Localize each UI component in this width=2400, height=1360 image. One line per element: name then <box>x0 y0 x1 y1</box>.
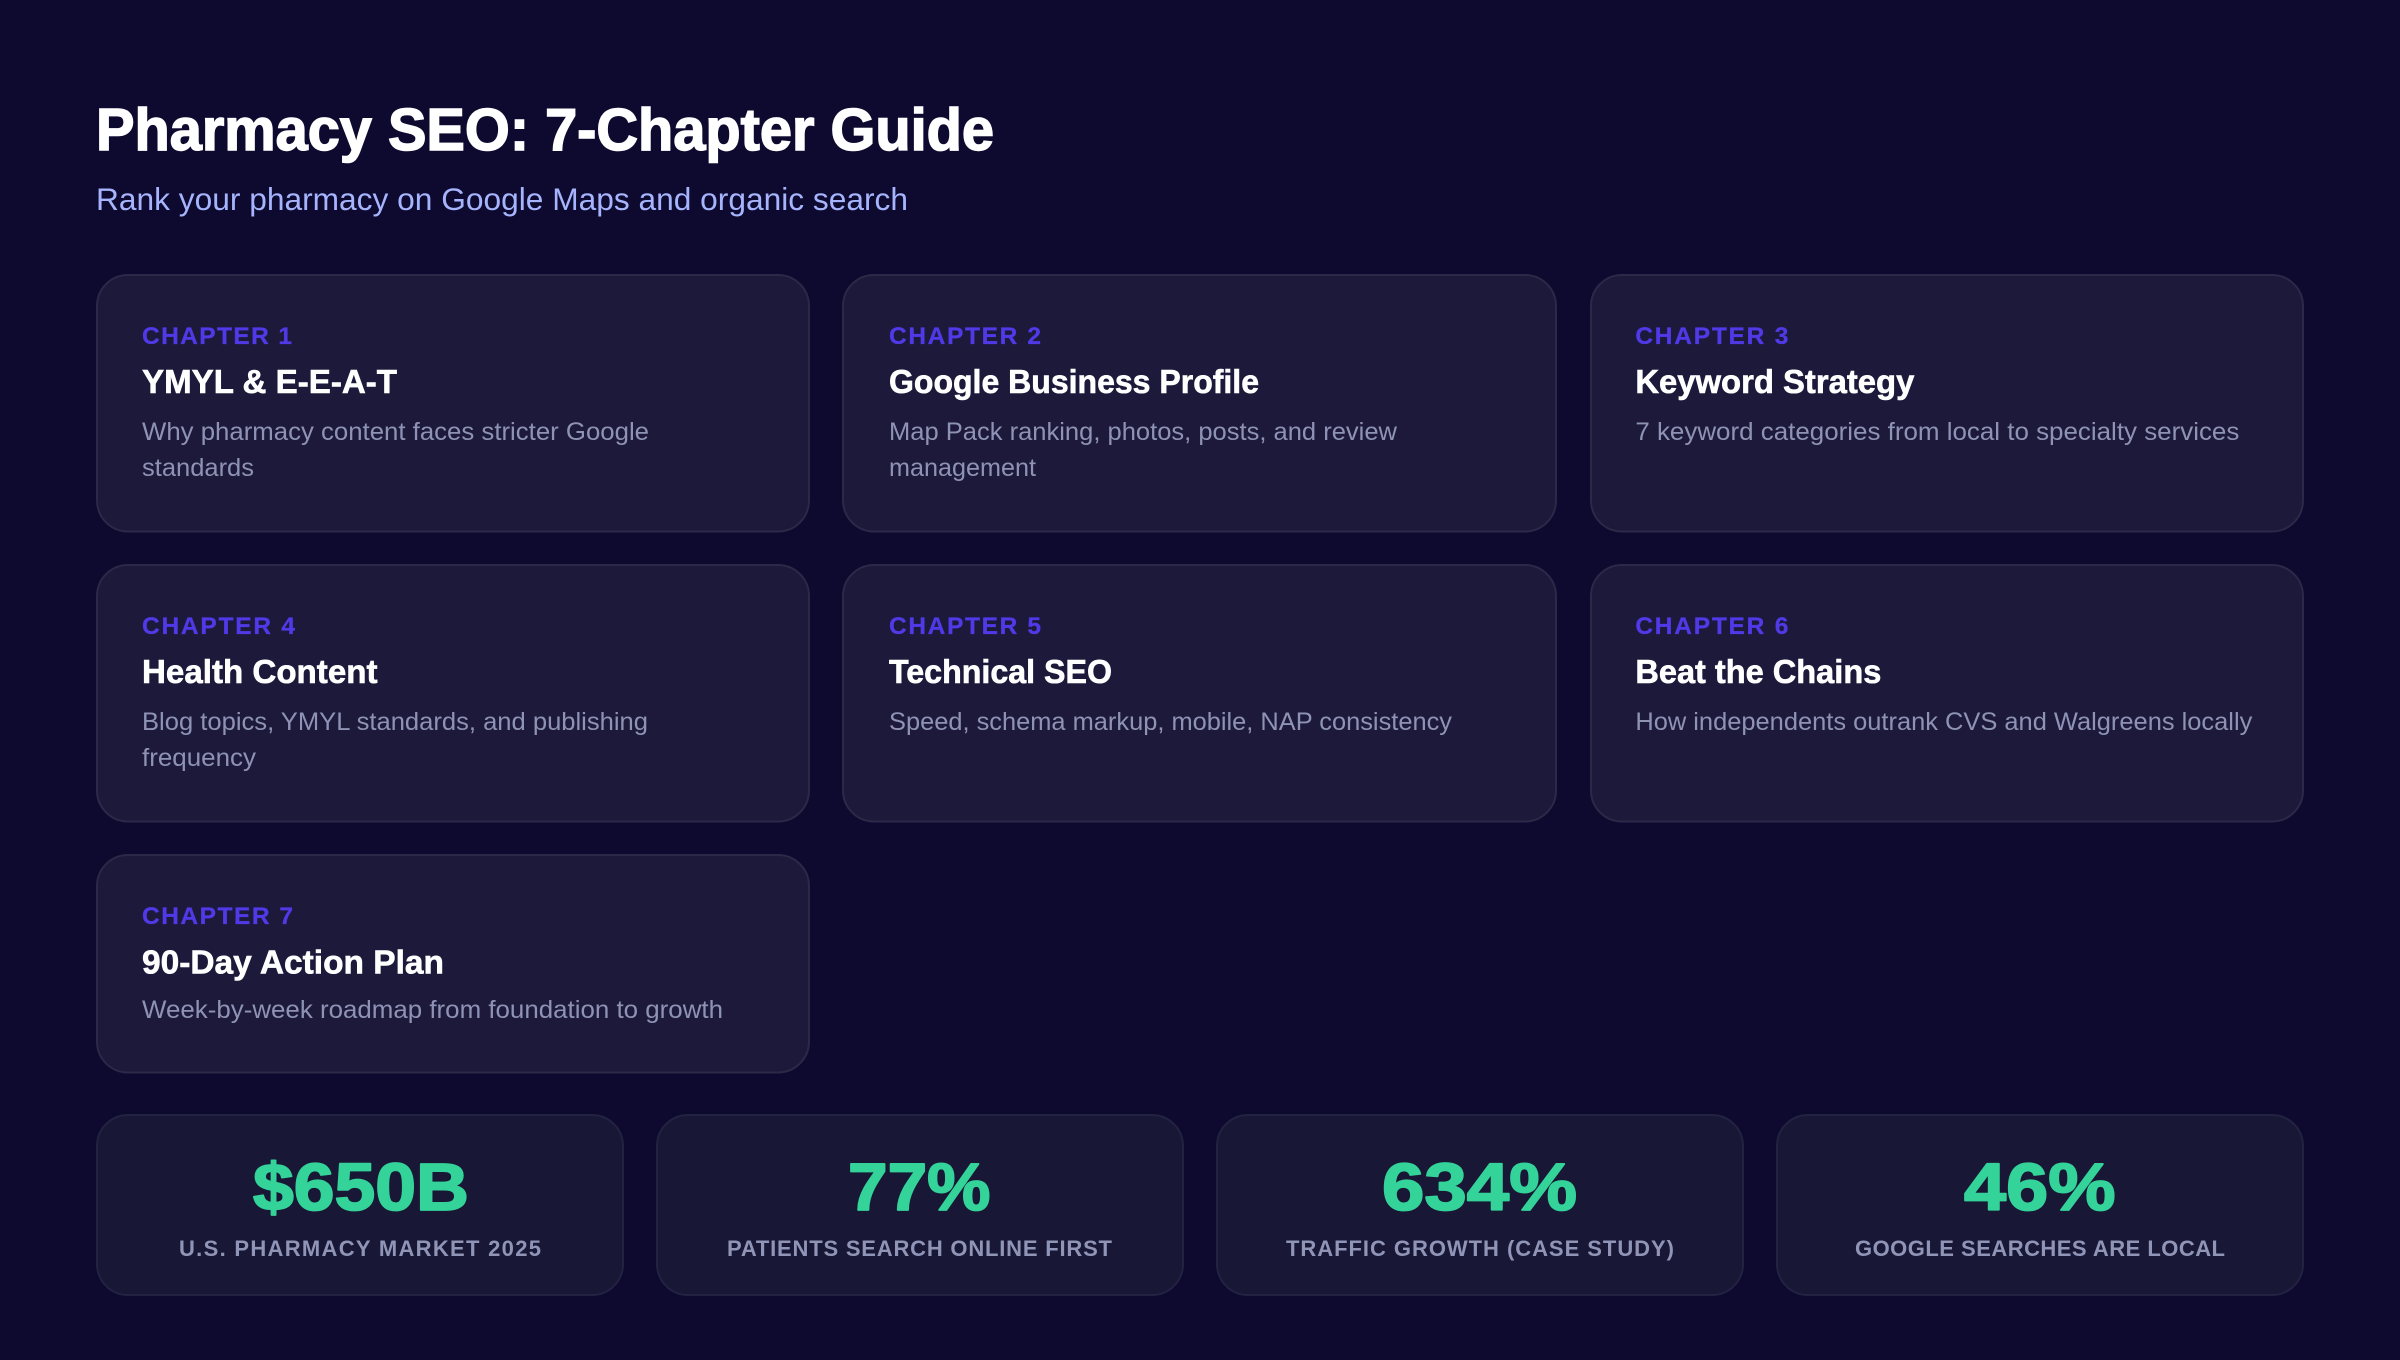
stat card: local searches <box>1777 1115 2303 1295</box>
chapter 5 description: Speed, schema markup, mobile, NAP consistency <box>889 708 1453 736</box>
panel: chapter 6 <box>1591 565 2303 822</box>
chapter 1 heading: YMYL & E-E-A-T <box>142 364 398 401</box>
stat label: patients: PATIENTS SEARCH ONLINE FIRST <box>727 1236 1113 1261</box>
stat card: market size <box>97 1115 623 1295</box>
chapter 1 description: Why pharmacy content faces stricter Google <box>142 418 649 446</box>
chapter 5 label: CHAPTER 5 <box>889 613 1041 640</box>
chapter 3 label: CHAPTER 3 <box>1635 323 1788 350</box>
chapter 2 description: Map Pack ranking, photos, posts, and review <box>889 418 1398 446</box>
stat label: market: U.S. PHARMACY MARKET 2025 <box>179 1236 541 1261</box>
chapter 3 description: 7 keyword categories from local to specialty services <box>1635 418 2239 446</box>
panel: chapter 5 <box>843 565 1556 822</box>
stat value: 46%: 46% <box>1964 1150 2116 1225</box>
panel: chapter 2 <box>843 275 1556 532</box>
stat value: 77%: 77% <box>848 1150 990 1225</box>
stat value: 634%: 634% <box>1382 1150 1577 1225</box>
chapter 4 description: frequency <box>142 744 257 772</box>
panel: chapter 4 <box>97 565 809 822</box>
chapter 2 description <box>889 418 1398 482</box>
chapter 3 heading: Keyword Strategy <box>1635 364 1915 401</box>
panel: chapter 7 <box>97 855 809 1072</box>
title: Pharmacy SEO: 7-Chapter Guide <box>96 97 994 163</box>
chapter 4 label: CHAPTER 4 <box>142 613 295 640</box>
chapter 5 heading: Technical SEO <box>889 654 1112 691</box>
chapter 7 description: Week-by-week roadmap from foundation to growth <box>142 996 723 1024</box>
chapter 1 description <box>142 418 649 482</box>
chapter 4 heading: Health Content <box>142 654 378 691</box>
stat label: local: GOOGLE SEARCHES ARE LOCAL <box>1855 1236 2225 1261</box>
chapter 4 description <box>142 708 648 772</box>
panel: chapter 1 <box>97 275 809 532</box>
stat card: patients search <box>657 1115 1183 1295</box>
chapter 2 heading: Google Business Profile <box>889 364 1259 401</box>
chapter 6 description: How independents outrank CVS and Walgreens locally <box>1635 708 2253 736</box>
chapter 7 heading: 90-Day Action Plan <box>142 944 444 982</box>
stat value: $650B: $650B <box>253 1150 469 1225</box>
chapter 2 label: CHAPTER 2 <box>889 323 1041 350</box>
chapter 4 description: Blog topics, YMYL standards, and publishing <box>142 708 648 736</box>
stat label: traffic: TRAFFIC GROWTH (CASE STUDY) <box>1286 1236 1674 1261</box>
chapter 6 heading: Beat the Chains <box>1635 654 1881 691</box>
chapter 2 description: management <box>889 454 1036 482</box>
chapter 1 description: standards <box>142 454 254 482</box>
chapter 6 label: CHAPTER 6 <box>1635 613 1788 640</box>
chapter 7 label: CHAPTER 7 <box>142 903 293 930</box>
chapter 1 label: CHAPTER 1 <box>142 323 292 350</box>
subtitle: Rank your pharmacy on Google Maps and organic search <box>96 181 908 217</box>
panel: chapter 3 <box>1591 275 2303 532</box>
stat card: traffic growth <box>1217 1115 1743 1295</box>
